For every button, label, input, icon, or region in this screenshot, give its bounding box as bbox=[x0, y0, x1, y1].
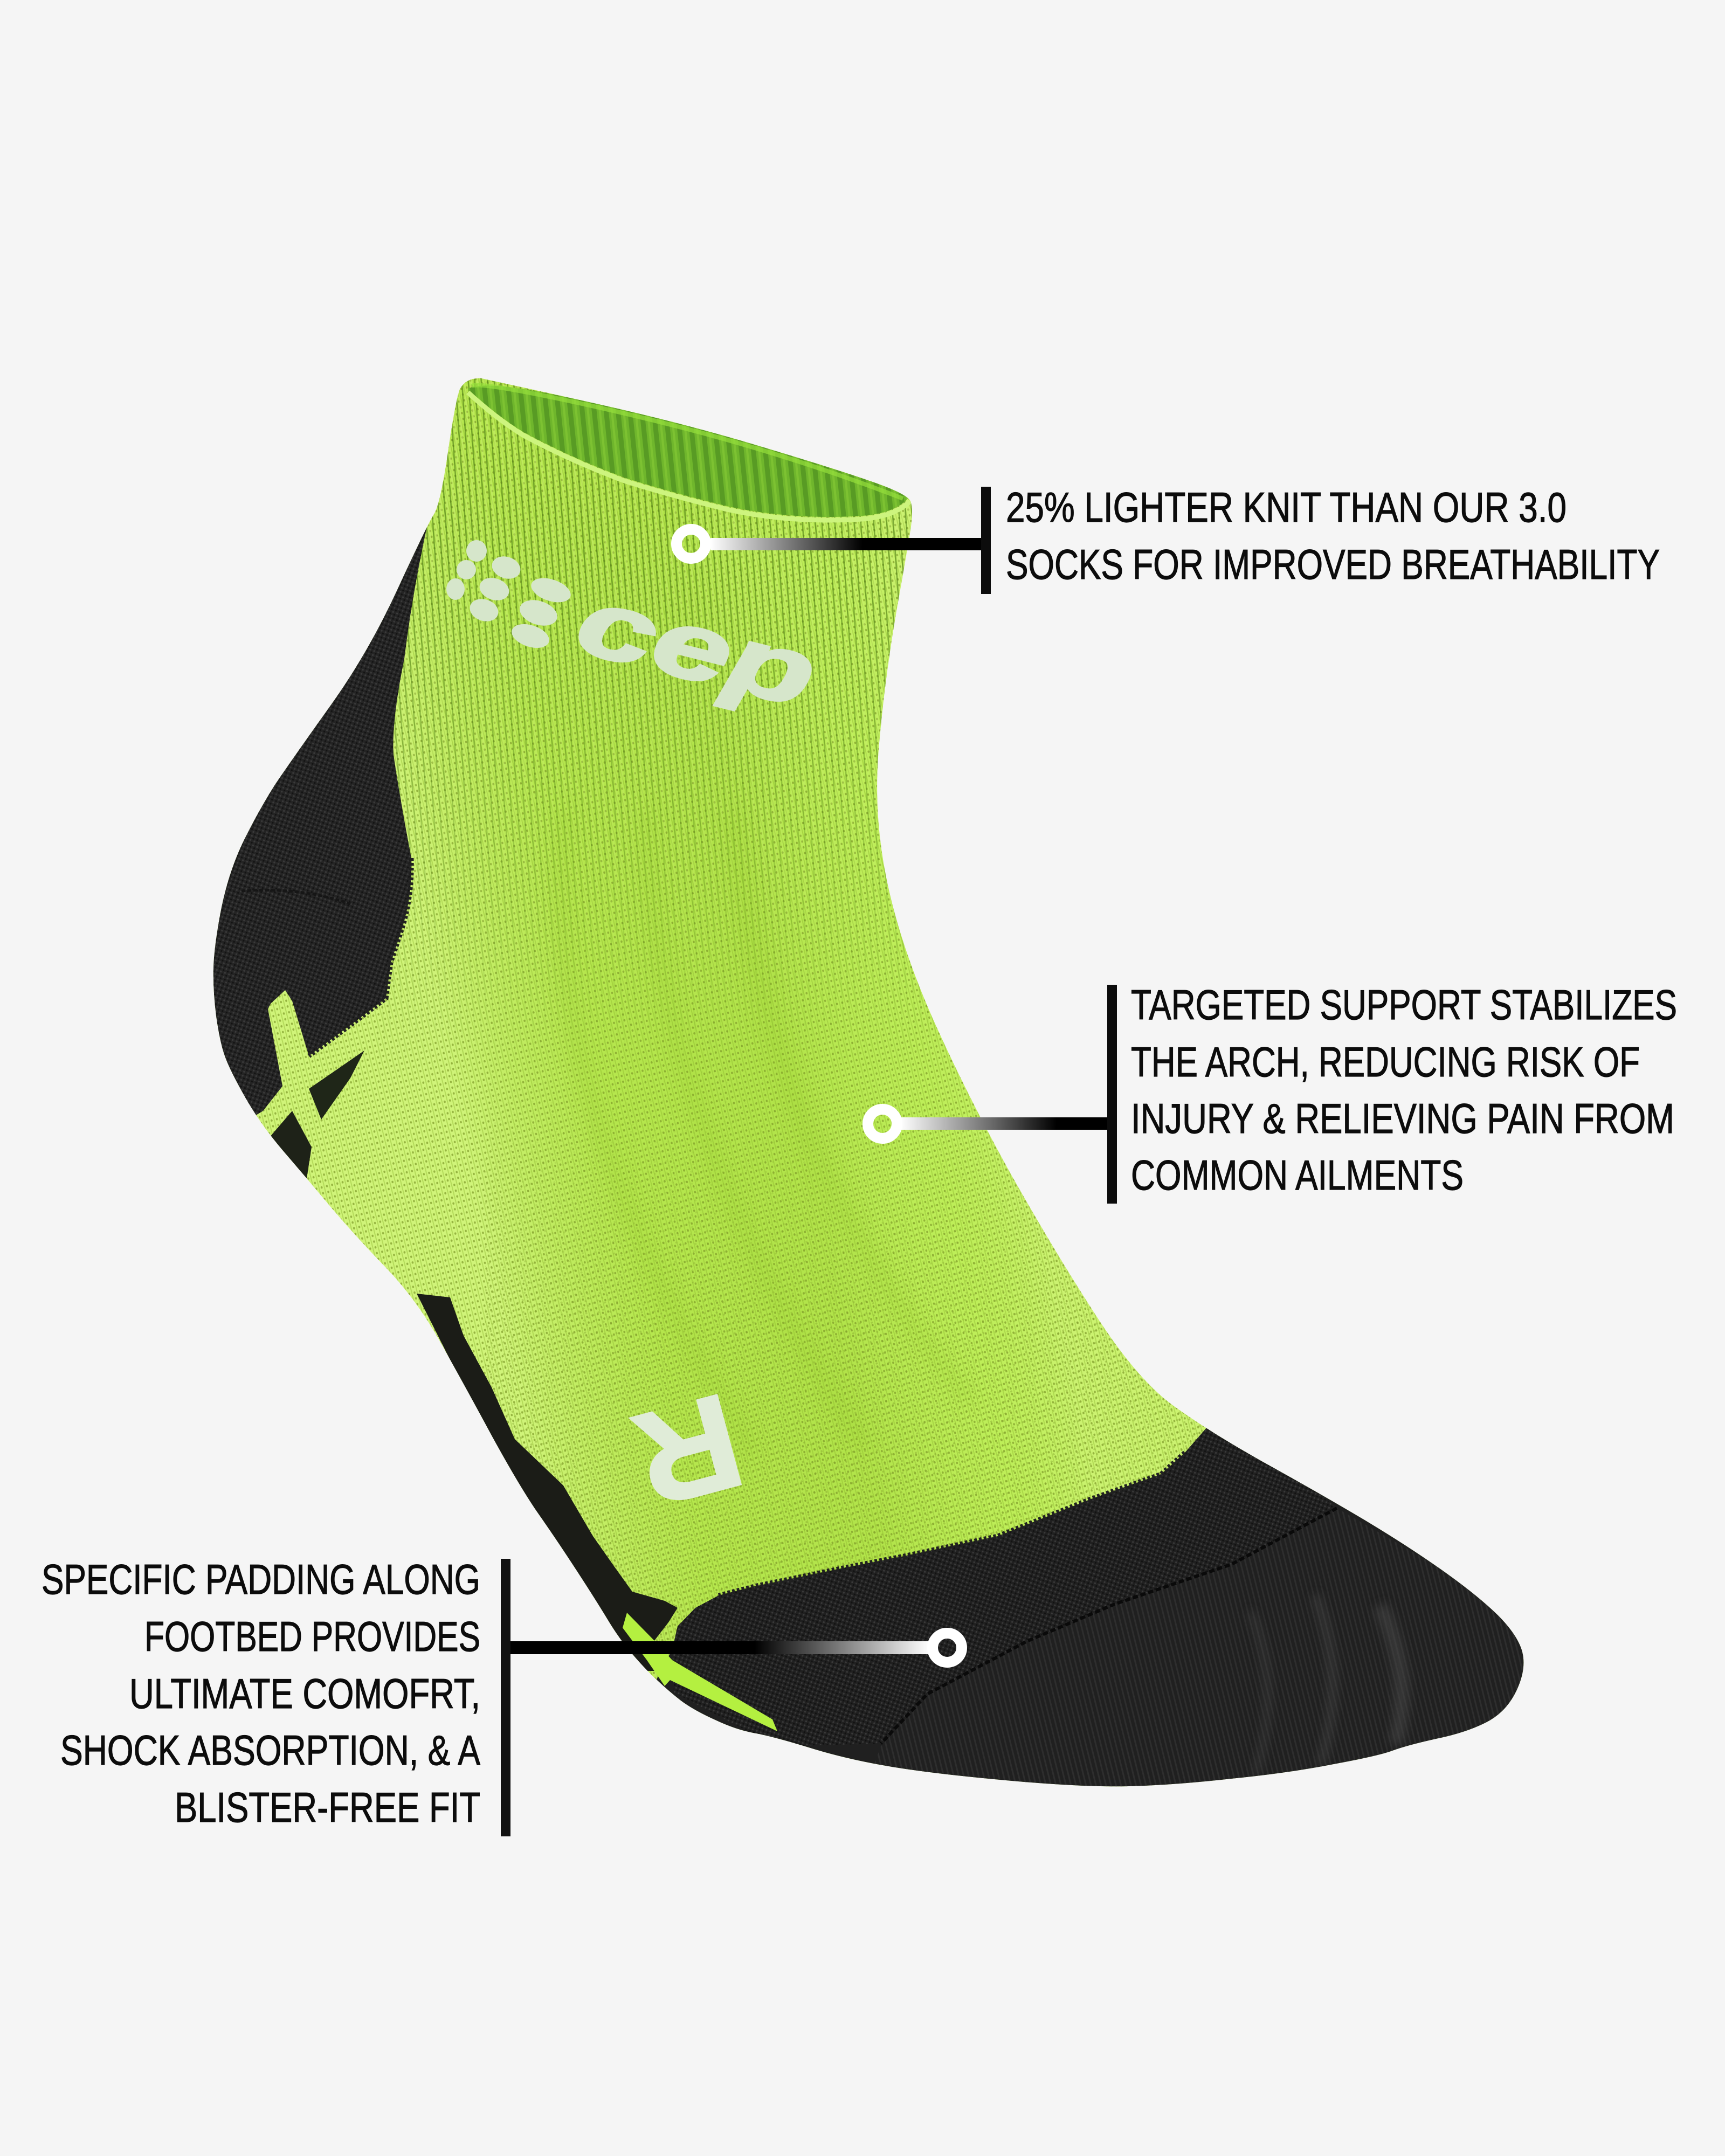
toe panel bbox=[647, 1423, 1563, 1806]
toe logo mark: R bbox=[620, 1365, 757, 1537]
callout text: ULTIMATE COMOFRT, bbox=[129, 1670, 480, 1717]
callout text bbox=[1006, 483, 1660, 588]
rib shading streaks bbox=[561, 808, 970, 1455]
sock body bbox=[213, 378, 1523, 1786]
marker ring bbox=[868, 1109, 897, 1138]
cuff inner lining bbox=[468, 385, 910, 520]
logo wordmark: cep bbox=[568, 568, 826, 728]
callout text: BLISTER-FREE FIT bbox=[175, 1784, 480, 1831]
heel panel bbox=[183, 524, 427, 1178]
callout: footbed padding bbox=[42, 1556, 962, 1836]
heel cross squares bbox=[309, 1051, 364, 1120]
toe folds bbox=[1251, 1595, 1402, 1773]
connector line bbox=[507, 1641, 930, 1654]
cuff knit ribs bbox=[377, 378, 935, 1033]
callout bar bbox=[1107, 985, 1117, 1204]
heel seam bbox=[242, 890, 352, 904]
toe seam bbox=[881, 1508, 1337, 1744]
callout text bbox=[1131, 981, 1677, 1199]
callout text: 25% LIGHTER KNIT THAN OUR 3.0 bbox=[1006, 483, 1567, 531]
marker ring bbox=[677, 529, 706, 558]
callout text bbox=[42, 1556, 480, 1831]
sole stripe bbox=[417, 1294, 678, 1671]
callout bar bbox=[501, 1559, 510, 1836]
sole green cross bbox=[623, 1613, 777, 1731]
connector line bbox=[710, 538, 985, 550]
toe upper mesh bbox=[672, 1423, 1337, 1746]
body shading bbox=[257, 378, 1206, 1777]
sock illustration bbox=[183, 367, 1563, 1822]
brand logo: cep bbox=[446, 540, 826, 728]
callout bar bbox=[981, 487, 991, 594]
connector line bbox=[900, 1117, 1110, 1130]
callout: lighter knit bbox=[677, 483, 1660, 594]
marker ring bbox=[933, 1633, 962, 1662]
callout text: COMMON AILMENTS bbox=[1131, 1151, 1464, 1199]
lower foot knit texture bbox=[485, 1104, 1293, 1724]
toe lower ribs bbox=[862, 1508, 1526, 1795]
toe edge teeth bbox=[719, 1453, 1185, 1595]
body knit texture bbox=[205, 367, 1283, 1822]
heel edge teeth bbox=[309, 858, 411, 1056]
callout: arch support bbox=[868, 981, 1677, 1204]
logo dots bbox=[446, 540, 574, 652]
callout text: SHOCK ABSORPTION, & A bbox=[60, 1726, 480, 1774]
callout text: FOOTBED PROVIDES bbox=[144, 1613, 480, 1660]
callout text: SPECIFIC PADDING ALONG bbox=[42, 1556, 480, 1603]
